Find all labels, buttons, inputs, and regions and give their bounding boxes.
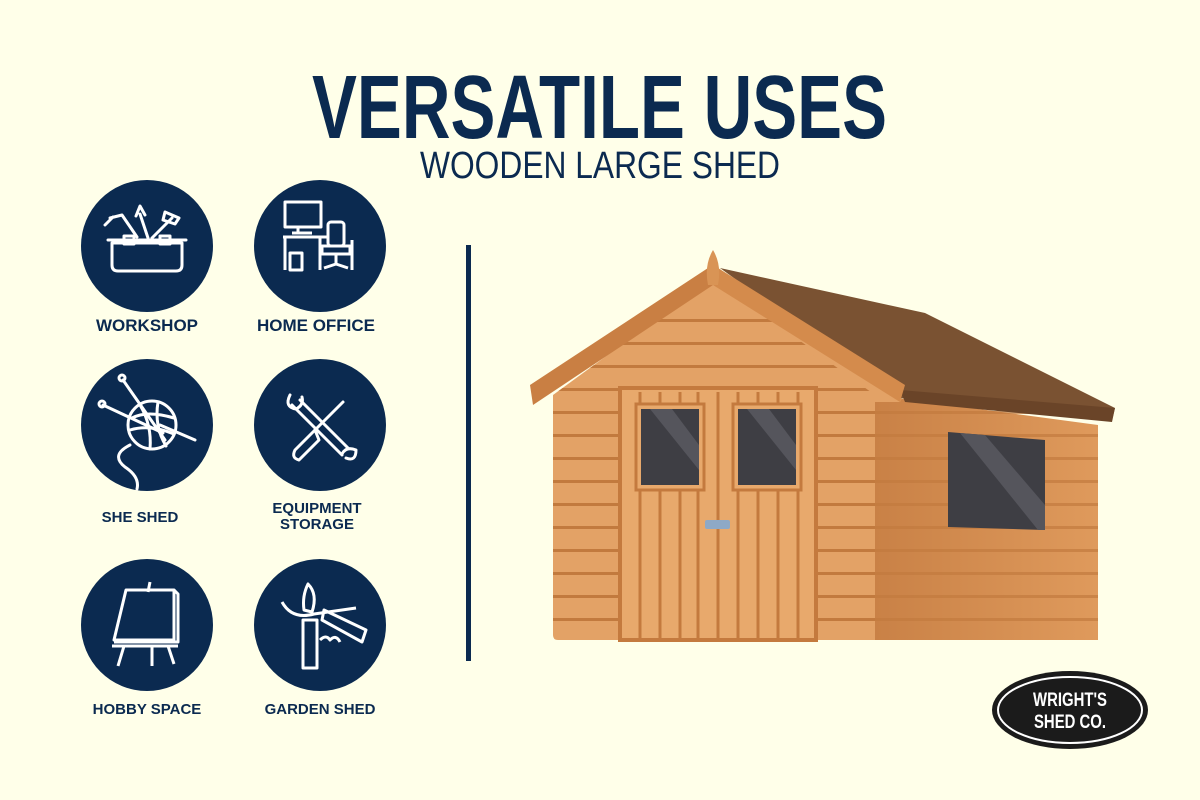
logo: SHED CO. xyxy=(1034,712,1106,733)
title: VERSATILE USES xyxy=(312,58,887,158)
side wall xyxy=(875,395,1098,640)
front gable wall xyxy=(553,278,875,640)
label: garden shed: GARDEN SHED xyxy=(265,701,376,718)
icon: garden shed xyxy=(254,559,386,691)
logo: WRIGHT'S xyxy=(1033,690,1107,711)
shed illustration xyxy=(530,250,1115,640)
label: hobby space: HOBBY SPACE xyxy=(93,701,201,718)
door xyxy=(620,388,816,640)
divider line xyxy=(466,245,471,661)
label: she shed: SHE SHED xyxy=(102,509,179,526)
front fascia boards xyxy=(530,268,713,405)
icon: workshop xyxy=(81,180,213,312)
label: workshop: WORKSHOP xyxy=(96,316,198,335)
logo xyxy=(992,671,1148,749)
icon: she shed xyxy=(81,359,213,491)
label: equipment storage: STORAGE xyxy=(280,516,354,533)
icon: home office xyxy=(254,180,386,312)
icon: equipment storage xyxy=(254,359,386,491)
side window xyxy=(948,432,1045,530)
label: equipment storage xyxy=(272,500,362,533)
subtitle: WOODEN LARGE SHED xyxy=(420,145,780,187)
roof xyxy=(720,268,1115,420)
label: equipment storage: EQUIPMENT xyxy=(272,500,362,517)
door windows xyxy=(636,404,704,490)
icon: hobby space xyxy=(81,559,213,691)
label: home office: HOME OFFICE xyxy=(257,316,375,335)
handle xyxy=(705,520,730,529)
